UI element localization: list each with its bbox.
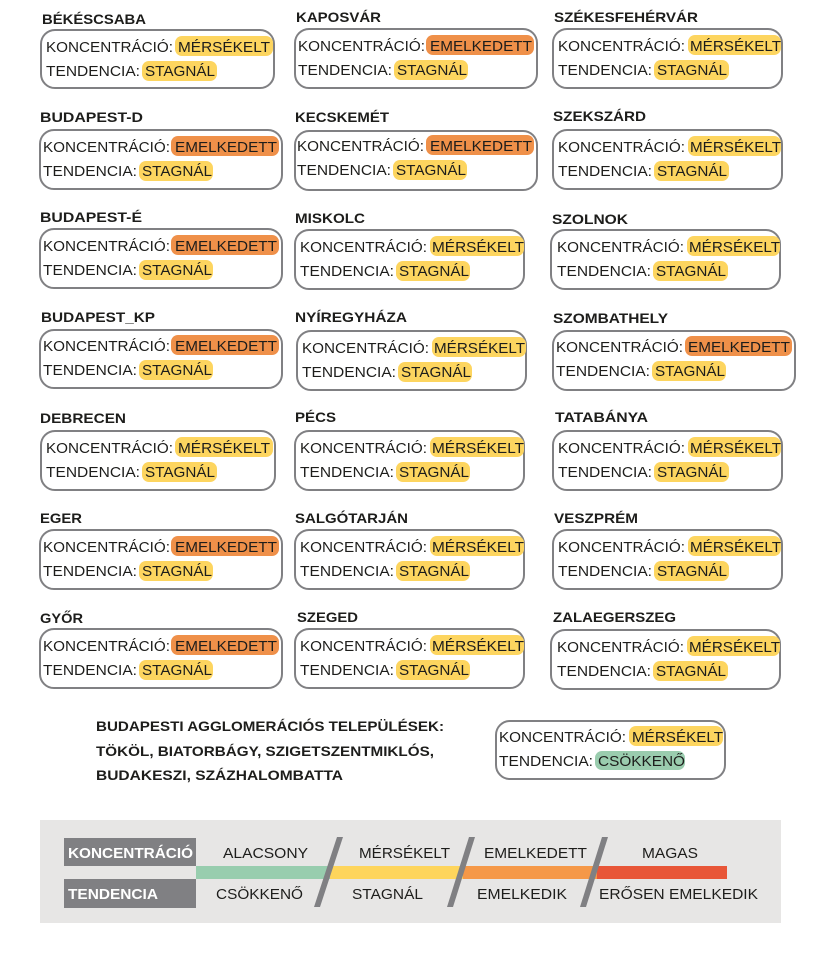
card: Szolnok: SZOLNOK [552,211,628,227]
legend labels: tendency levels: CSÖKKENŐ [216,885,303,903]
card: Eger: EMELKEDETT [175,539,277,556]
card: Nyíregyháza: KONCENTRÁCIÓ: [302,340,429,357]
card: Tatabánya: TENDENCIA: [558,464,652,481]
legend labels: concentration levels: MAGAS [642,845,698,862]
card: Kaposvár: KAPOSVÁR [296,9,381,25]
legend labels: tendency levels [216,885,758,903]
card: Kecskemét: STAGNÁL [396,162,466,179]
text block: Budapest agglomeration settlements: TÖKÖL, BIATORBÁGY, SZIGETSZENTMIKLÓS, [96,742,434,759]
card: Salgótarján: KONCENTRÁCIÓ: [300,539,427,556]
card: Budapest-É: EMELKEDETT [175,238,277,255]
card: agglomeration: KONCENTRÁCIÓ: [499,729,626,746]
legend labels: concentration levels [223,845,698,862]
legend label: koncentráció [64,838,196,866]
card: Budapest-D: KONCENTRÁCIÓ: [43,139,170,156]
card: Eger [40,510,282,589]
card: Miskolc: MÉRSÉKELT [432,239,524,256]
text block: Budapest agglomeration settlements: BUDAKESZI, SZÁZHALOMBATTA [96,767,343,783]
card: Szekszárd: SZEKSZÁRD [553,108,646,124]
card: Kaposvár: EMELKEDETT [430,38,532,55]
card: Békéscsaba [41,11,274,88]
card: Szeged [295,609,524,688]
card: Zalaegerszeg: KONCENTRÁCIÓ: [557,639,684,656]
card: Kecskemét: KONCENTRÁCIÓ: [297,138,424,155]
card: Debrecen: STAGNÁL [145,464,215,481]
card: Pécs: TENDENCIA: [300,464,394,481]
card: Nyíregyháza: TENDENCIA: [302,364,396,381]
legend labels: tendency levels: ERŐSEN EMELKEDIK [599,886,758,903]
card: Budapest_KP: BUDAPEST_KP [41,309,155,325]
card: Veszprém: STAGNÁL [657,563,727,580]
card: Szombathely: TENDENCIA: [556,363,650,380]
legend labels: concentration levels: EMELKEDETT [484,845,587,862]
card: Kaposvár: KONCENTRÁCIÓ: [298,38,425,55]
card: Szekszárd: KONCENTRÁCIÓ: [558,139,685,156]
card: Székesfehérvár: KONCENTRÁCIÓ: [558,38,685,55]
card: Győr: STAGNÁL [142,662,212,679]
card: Békéscsaba: MÉRSÉKELT [178,39,270,56]
card: agglomeration: MÉRSÉKELT [632,729,723,746]
card: Békéscsaba: STAGNÁL [145,63,215,80]
card: Szekszárd: STAGNÁL [657,163,727,180]
card: Miskolc: MISKOLC [295,210,365,226]
card: Békéscsaba: TENDENCIA: [46,63,140,80]
card: Zalaegerszeg [551,609,780,689]
card: Eger: KONCENTRÁCIÓ: [43,539,170,556]
card: Pécs: PÉCS [295,409,336,425]
card: Nyíregyháza: MÉRSÉKELT [434,340,525,357]
card: Veszprém: VESZPRÉM [554,510,638,526]
card: Budapest-É: BUDAPEST-É [40,209,142,225]
card: Szeged: SZEGED [297,609,358,625]
card: Kecskemét: KECSKEMÉT [295,109,389,125]
card: Pécs [295,409,524,490]
card: Kecskemét: TENDENCIA: [297,162,391,179]
card: Budapest-É: TENDENCIA: [43,262,137,279]
card: Eger: EGER [40,510,82,526]
card: Eger: TENDENCIA: [43,563,137,580]
card: Székesfehérvár: MÉRSÉKELT [690,38,781,55]
legend labels: concentration levels: ALACSONY [223,845,308,862]
legend labels: concentration levels: MÉRSÉKELT [359,845,450,862]
card: Szolnok: KONCENTRÁCIÓ: [557,239,684,256]
card: Pécs: MÉRSÉKELT [432,440,524,457]
card: Budapest-É: STAGNÁL [142,262,212,279]
legend separators [314,837,608,907]
card: Tatabánya: TATABÁNYA [555,409,648,425]
card: Salgótarján: TENDENCIA: [300,563,394,580]
card: Szombathely: STAGNÁL [655,363,725,380]
legend label: tendencia [64,879,196,908]
card: Szekszárd [553,108,782,189]
card: agglomeration: CSÖKKENŐ [598,752,685,770]
card: agglomeration: TENDENCIA: [499,753,593,770]
card: Szeged: STAGNÁL [399,662,469,679]
card: Székesfehérvár: STAGNÁL [657,62,727,79]
card: Tatabánya [553,409,782,490]
text block: Budapest agglomeration settlements: BUDAPESTI AGGLOMERÁCIÓS TELEPÜLÉSEK: [96,717,444,734]
card: Budapest_KP: EMELKEDETT [175,338,277,355]
card: Miskolc: TENDENCIA: [300,263,394,280]
card: Debrecen: TENDENCIA: [46,464,140,481]
card: Tatabánya: KONCENTRÁCIÓ: [558,440,685,457]
card: Salgótarján: MÉRSÉKELT [432,539,524,556]
legend label: tendencia: TENDENCIA [68,886,158,903]
card: Zalaegerszeg: STAGNÁL [656,663,726,680]
legend labels: tendency levels: EMELKEDIK [477,886,567,903]
card: Tatabánya: STAGNÁL [657,464,727,481]
card: Eger: STAGNÁL [142,563,212,580]
card: Szolnok: MÉRSÉKELT [689,239,780,256]
card: Budapest-D: EMELKEDETT [175,139,277,156]
card: Szombathely: EMELKEDETT [688,339,790,356]
card: agglomeration [496,721,725,779]
card: Tatabánya: MÉRSÉKELT [690,440,781,457]
card: Budapest-É [40,209,282,288]
card: Békéscsaba: BÉKÉSCSABA [42,11,146,27]
card: Budapest-É: KONCENTRÁCIÓ: [43,238,170,255]
card: Szeged: KONCENTRÁCIÓ: [300,638,427,655]
card: Szolnok [551,211,780,289]
card: Debrecen: DEBRECEN [40,410,126,426]
card: Veszprém: MÉRSÉKELT [690,539,781,556]
card: Veszprém: TENDENCIA: [558,563,652,580]
card: Szolnok: STAGNÁL [656,263,726,280]
card: Nyíregyháza: NYÍREGYHÁZA [295,309,407,325]
card: Kecskemét [295,109,537,190]
legend panel [40,820,781,923]
legend colour bar [196,866,727,879]
card: Miskolc [295,210,524,289]
card: Budapest-D: STAGNÁL [142,163,212,180]
card: Veszprém [553,510,782,589]
card: Szombathely [553,310,795,390]
card: Salgótarján: STAGNÁL [399,563,469,580]
card: Pécs: STAGNÁL [399,464,469,481]
card: Székesfehérvár: TENDENCIA: [558,62,652,79]
card: Pécs: KONCENTRÁCIÓ: [300,440,427,457]
card: Székesfehérvár [553,9,782,88]
card: Zalaegerszeg: MÉRSÉKELT [689,639,780,656]
card: Székesfehérvár: SZÉKESFEHÉRVÁR [554,9,698,25]
card: Zalaegerszeg: ZALAEGERSZEG [553,609,676,625]
card: Győr [40,609,282,688]
card: Debrecen: KONCENTRÁCIÓ: [46,440,173,457]
card: Veszprém: KONCENTRÁCIÓ: [558,539,685,556]
card: Debrecen: MÉRSÉKELT [178,440,270,457]
card: Győr: EMELKEDETT [175,638,277,655]
card: Szolnok: TENDENCIA: [557,263,651,280]
card: Győr: GYŐR [40,609,83,626]
card: Nyíregyháza [295,309,526,390]
card: Kaposvár: TENDENCIA: [298,62,392,79]
card: Salgótarján: SALGÓTARJÁN [295,509,408,526]
card: Budapest_KP: KONCENTRÁCIÓ: [43,338,170,355]
card: Győr: KONCENTRÁCIÓ: [43,638,170,655]
card: Nyíregyháza: STAGNÁL [401,364,471,381]
card: Budapest-D [40,109,282,189]
card: Szombathely: SZOMBATHELY [553,310,669,326]
card: Kaposvár [295,9,537,88]
card: Szeged: TENDENCIA: [300,662,394,679]
text block: Budapest agglomeration settlements [96,717,444,783]
card: Zalaegerszeg: TENDENCIA: [557,663,651,680]
card: Szekszárd: MÉRSÉKELT [690,139,781,156]
card: Budapest_KP: STAGNÁL [142,362,212,379]
card: Győr: TENDENCIA: [43,662,137,679]
card: Budapest-D: BUDAPEST-D [40,109,143,125]
legend label: koncentráció: KONCENTRÁCIÓ [68,844,193,862]
card: Salgótarján [295,509,524,589]
card: Kecskemét: EMELKEDETT [430,138,532,155]
card: Békéscsaba: KONCENTRÁCIÓ: [46,39,173,56]
legend labels: tendency levels: STAGNÁL [352,886,423,903]
card: Budapest_KP: TENDENCIA: [43,362,137,379]
card: Miskolc: STAGNÁL [399,263,469,280]
card: Szombathely: KONCENTRÁCIÓ: [556,339,683,356]
card: Szekszárd: TENDENCIA: [558,163,652,180]
card: Kaposvár: STAGNÁL [397,62,467,79]
card: Debrecen [40,410,275,490]
card: Budapest-D: TENDENCIA: [43,163,137,180]
card: Miskolc: KONCENTRÁCIÓ: [300,239,427,256]
card: Szeged: MÉRSÉKELT [432,638,524,655]
card: Budapest_KP [40,309,282,388]
